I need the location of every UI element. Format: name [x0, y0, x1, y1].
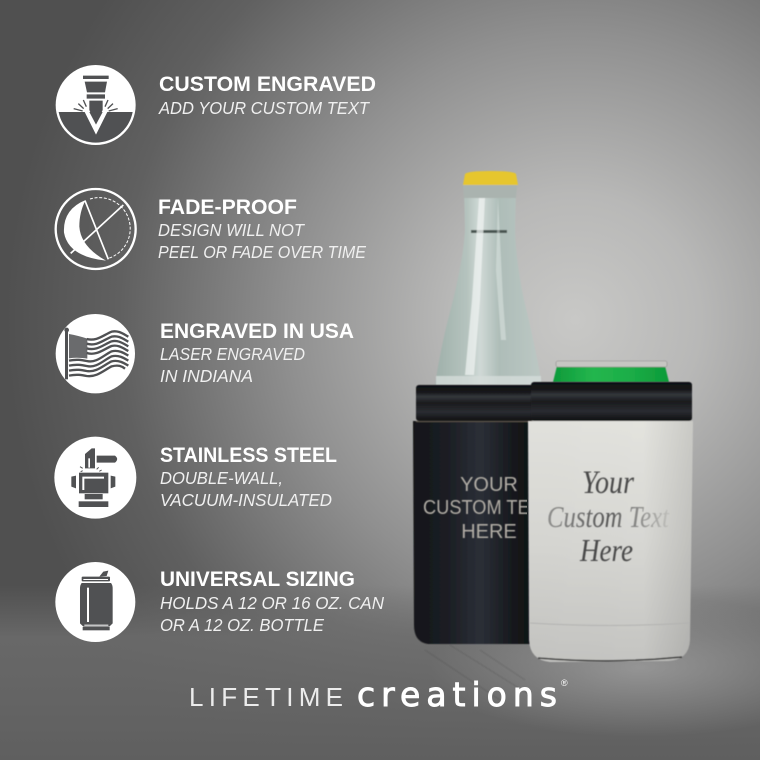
black tumbler engraving: YOUR — [460, 474, 518, 496]
feature: fade-proof — [56, 189, 366, 269]
icon: laser engraving — [56, 65, 136, 145]
brand logo: ® — [561, 678, 568, 688]
icon: beverage can — [55, 562, 135, 642]
black tumbler engraving: HERE — [461, 521, 517, 543]
brand logo: LIFETIME — [189, 682, 343, 712]
heading: STAINLESS STEEL — [160, 444, 337, 467]
description: DESIGN WILL NOT — [158, 220, 305, 240]
icon: american flag — [56, 314, 135, 393]
feature: custom engraved — [56, 65, 376, 145]
brand logo — [189, 675, 568, 714]
brand logo: creations — [357, 675, 557, 714]
heading: UNIVERSAL SIZING — [160, 568, 355, 591]
heading: ENGRAVED IN USA — [160, 320, 354, 343]
description line 2: OR A 12 OZ. BOTTLE — [160, 615, 324, 635]
heading: FADE-PROOF — [158, 196, 297, 219]
icon: crossed-out moon — [56, 189, 136, 269]
white tumbler — [528, 382, 693, 662]
description: DOUBLE-WALL, — [160, 468, 283, 488]
bottle cap — [463, 171, 518, 185]
description line 2: IN INDIANA — [160, 366, 253, 386]
aluminium can — [553, 361, 669, 382]
description: LASER ENGRAVED — [160, 344, 305, 364]
description: HOLDS A 12 OR 16 OZ. CAN — [160, 593, 384, 613]
heading: CUSTOM ENGRAVED — [159, 73, 376, 96]
white tumbler engraving: Your — [582, 465, 634, 501]
description line 2: PEEL OR FADE OVER TIME — [158, 242, 366, 262]
black tumbler engraving: CUSTOM TEXT — [423, 497, 553, 519]
product photo: bottle and insulated can coolers — [413, 171, 693, 662]
black tumbler — [413, 385, 535, 644]
description line 2: VACUUM-INSULATED — [160, 490, 332, 510]
white tumbler engraving: Here — [579, 532, 633, 568]
feature: stainless steel — [54, 437, 337, 519]
feature: universal sizing — [55, 562, 384, 642]
white tumbler engraving: Custom Text — [547, 499, 670, 534]
feature: engraved in usa — [56, 314, 354, 393]
glass bottle — [435, 171, 542, 385]
black tumbler engraving — [423, 476, 527, 539]
description: ADD YOUR CUSTOM TEXT — [158, 98, 370, 118]
wooden table surface — [0, 585, 760, 760]
white tumbler engraving — [547, 465, 670, 568]
icon: anvil and hammer — [54, 437, 136, 519]
